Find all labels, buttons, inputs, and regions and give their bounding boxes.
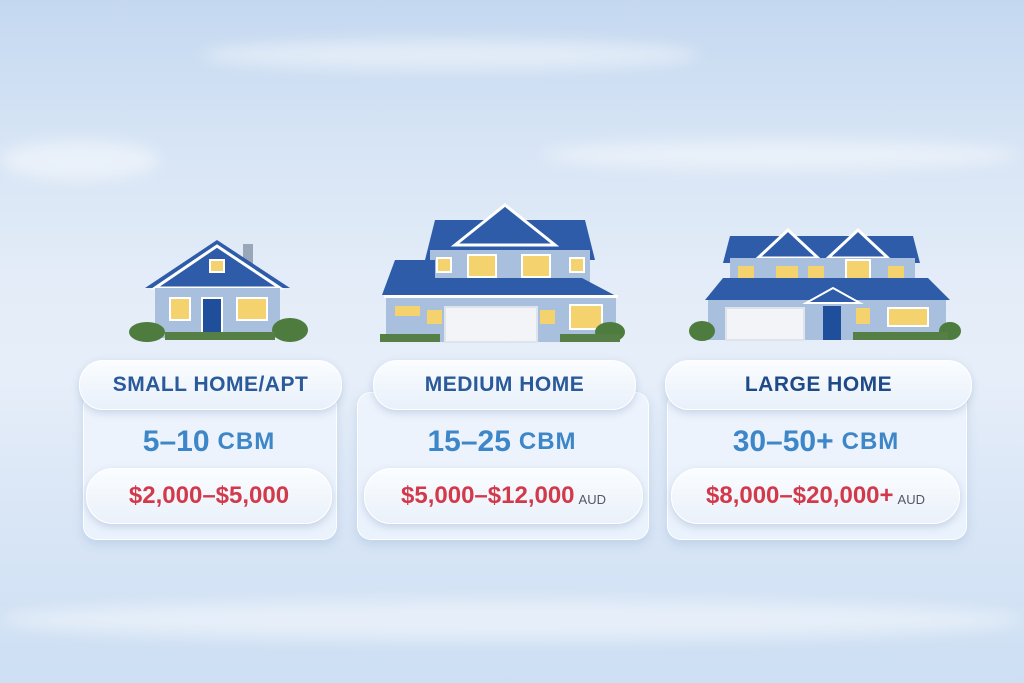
panel: large home — [667, 392, 967, 540]
icon: small house — [129, 240, 308, 342]
volume: large: CBM — [842, 428, 899, 455]
icon: medium house — [380, 203, 625, 343]
price: large: $8,000–$20,000+ — [706, 482, 894, 509]
volume: small: 5–10 — [143, 425, 210, 458]
volume: medium — [427, 425, 577, 458]
price: large: AUD — [898, 492, 925, 506]
volume: medium: CBM — [519, 428, 577, 455]
heading: medium home: MEDIUM HOME — [425, 373, 584, 396]
heading: large home — [665, 360, 972, 410]
volume: medium: 15–25 — [427, 425, 511, 458]
price: small — [86, 468, 332, 524]
heading: medium home — [373, 360, 636, 410]
price: large — [671, 468, 960, 524]
panel: medium home — [357, 392, 649, 540]
heading: large home: LARGE HOME — [745, 373, 892, 396]
volume: large: 30–50+ — [733, 425, 834, 458]
price: medium — [364, 468, 643, 524]
price: medium: AUD — [579, 492, 606, 506]
volume: large — [733, 425, 899, 458]
price: medium: $5,000–$12,000 — [401, 482, 575, 509]
heading: small home — [79, 360, 342, 410]
price: small: $2,000–$5,000 — [129, 482, 289, 509]
volume: small: CBM — [218, 428, 275, 455]
panel: small home — [83, 392, 337, 540]
icon: large house — [689, 228, 961, 341]
volume: small — [143, 425, 275, 458]
heading: small home: SMALL HOME/APT — [113, 373, 308, 396]
